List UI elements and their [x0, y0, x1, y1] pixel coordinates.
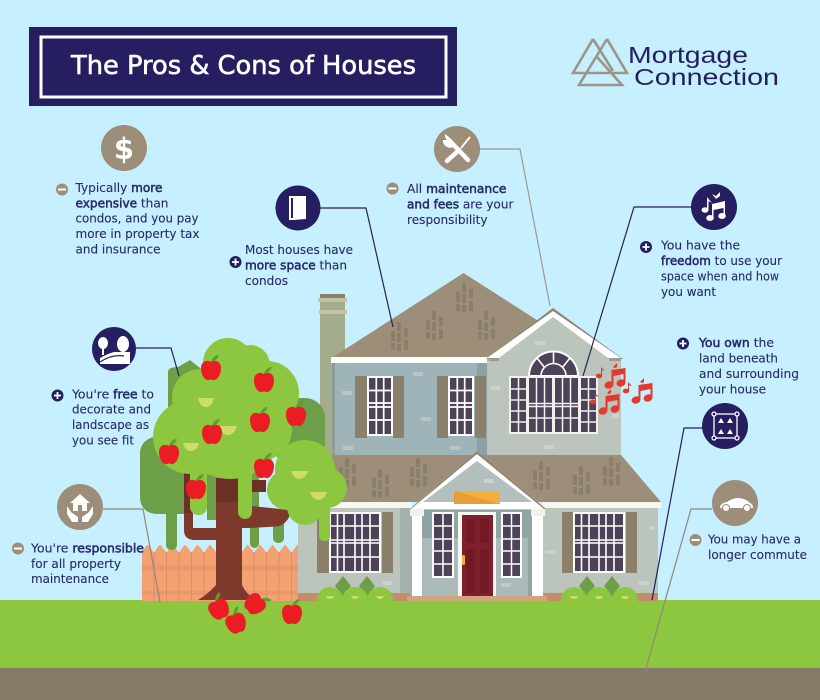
icon: tools	[434, 126, 480, 172]
back foliage	[140, 360, 325, 550]
text: freedom: you want	[661, 285, 716, 299]
fruit highlights	[183, 398, 327, 500]
text: maintenance: and fees are your	[407, 198, 514, 212]
fence	[142, 545, 298, 601]
right gable wall	[487, 314, 621, 455]
ground	[0, 600, 820, 669]
text: freedom: You have the	[660, 238, 740, 252]
text: decorate: you see fit	[72, 434, 134, 448]
icon: door	[276, 186, 320, 230]
porch wall	[422, 510, 532, 597]
music notes	[590, 363, 653, 416]
text: more space: more space than	[245, 258, 347, 272]
road	[0, 668, 820, 700]
text: freedom: space when and how	[661, 270, 779, 284]
text: more space	[230, 243, 353, 288]
porch gable	[410, 451, 546, 509]
icon: dollar	[101, 125, 147, 171]
text: commute	[690, 532, 807, 562]
tree	[140, 338, 347, 600]
logo: Mortgage Connection: Mortgage	[628, 42, 748, 68]
door	[458, 512, 496, 597]
text: expensive: expensive than	[76, 196, 168, 210]
text: expensive: Typically more	[74, 181, 162, 195]
text: own the land: and surrounding	[699, 367, 799, 381]
title: The Pros & Cons of Houses	[70, 51, 416, 81]
icon: home in hands	[57, 484, 103, 530]
upper windows	[355, 376, 486, 438]
text: freedom: freedom to use your	[661, 254, 782, 268]
arched window	[509, 351, 598, 434]
text: own the land: your house	[699, 382, 766, 396]
text: own the land: land beneath	[699, 352, 778, 366]
text: expensive	[56, 181, 200, 256]
lower windows	[317, 512, 637, 578]
text: expensive: condos, and you pay	[76, 212, 198, 226]
upper roof	[333, 273, 540, 357]
text: more space: Most houses have	[245, 243, 353, 257]
text: own the land	[677, 336, 799, 396]
text: more space: condos	[245, 274, 288, 288]
gable trim	[486, 308, 623, 361]
text: maintenance	[386, 182, 514, 227]
fallen apples	[204, 587, 302, 636]
chimney	[318, 294, 347, 485]
text: decorate: landscape as	[72, 418, 149, 432]
text: decorate	[52, 388, 154, 448]
upper cornice	[331, 357, 487, 363]
text: responsible: You're responsible	[30, 542, 144, 556]
apples	[159, 355, 306, 499]
icon: landscape	[92, 327, 136, 371]
icon: car	[712, 480, 758, 526]
lower wall	[298, 508, 658, 598]
foundation	[298, 593, 658, 601]
crown	[153, 338, 347, 541]
text: own the land: You own the	[698, 336, 774, 350]
leader lines	[103, 149, 712, 672]
text: responsible: maintenance	[31, 572, 109, 586]
icon: dollar: $	[114, 132, 134, 166]
lower roof	[298, 455, 661, 502]
icon: music	[691, 184, 737, 230]
logo: Mortgage Connection: Connection	[634, 64, 779, 90]
shrubs	[317, 576, 638, 613]
lower cornice	[298, 502, 412, 508]
text: commute: You may have a	[707, 532, 801, 546]
text: decorate: decorate and	[72, 402, 151, 416]
logo: Mortgage Connection	[573, 39, 779, 90]
text: commute: longer commute	[708, 548, 807, 562]
title	[29, 27, 457, 106]
icon: yard	[702, 403, 748, 449]
text: decorate: You're free to	[71, 388, 154, 402]
text: maintenance: All maintenance	[407, 182, 506, 196]
text: expensive: more in property tax	[76, 227, 200, 241]
trunk and branches	[184, 473, 290, 600]
upper left wall	[332, 363, 488, 456]
text: maintenance: responsibility	[407, 213, 488, 227]
columns	[410, 509, 545, 597]
text: expensive: and insurance	[76, 242, 160, 256]
text: freedom	[640, 238, 782, 299]
text: responsible	[12, 542, 144, 586]
house	[298, 273, 661, 613]
text: responsible: for all property	[31, 557, 121, 571]
